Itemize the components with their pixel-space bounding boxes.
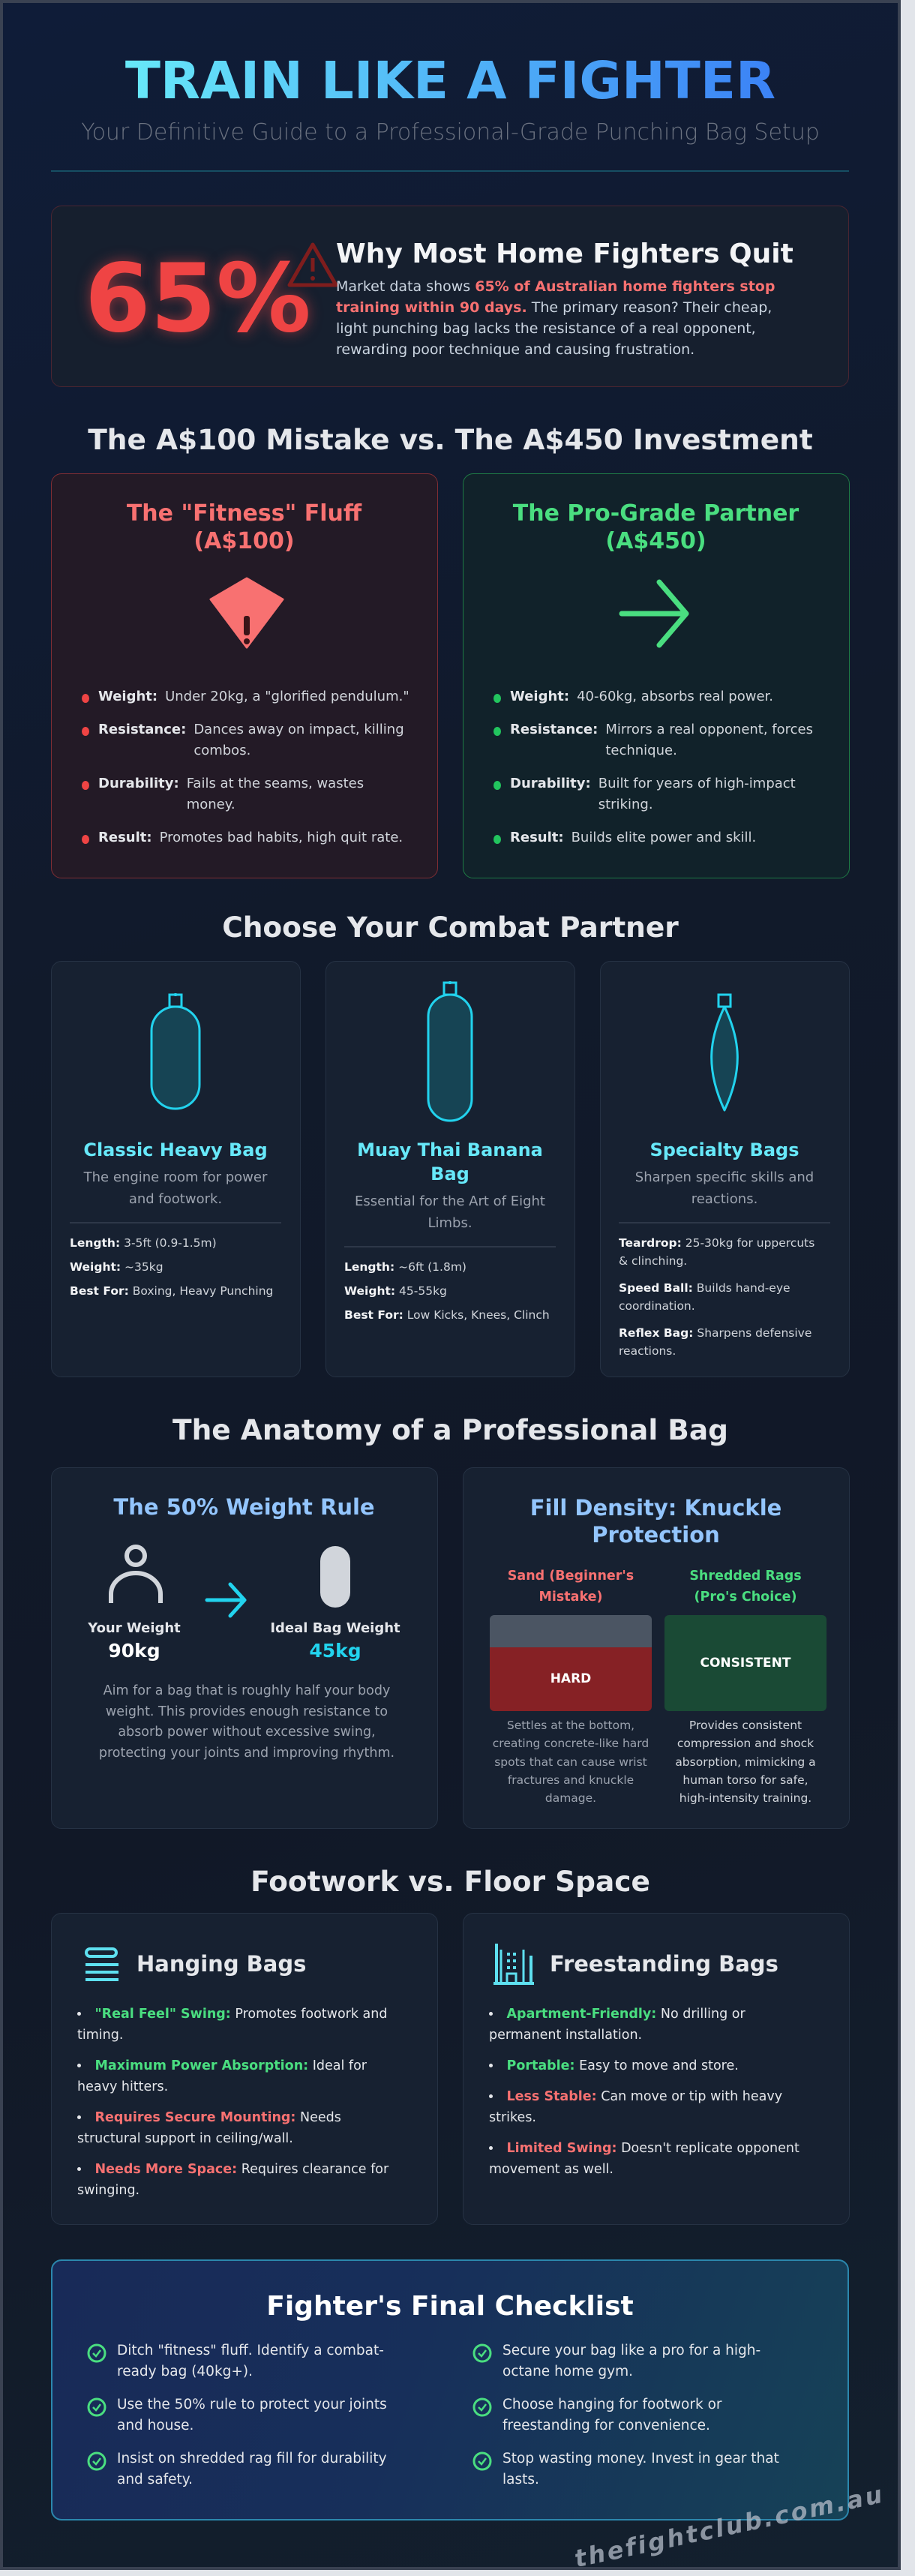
panel: hanging bags	[51, 1913, 438, 2225]
checklist title: Fighter's Final Checklist	[266, 2291, 634, 2322]
icon: arrow	[206, 1583, 247, 1617]
bag title: Length: ~6ft (1.8m)	[344, 1260, 466, 1274]
rags column: Provides consistent compression and shock absorption, mimicking a human torso for safe, high-intensity training.	[675, 1719, 816, 1805]
bullet list	[82, 689, 410, 845]
panel title: Fill Density: Knuckle	[530, 1495, 782, 1521]
left column items	[87, 2343, 387, 2487]
panel: muay thai bag	[326, 961, 575, 1377]
bullet list: Resistance:	[510, 722, 598, 737]
ideal bag weight	[270, 1620, 400, 1662]
subtitle: Your Definitive Guide to a Professional-Grade Punching Bag Setup	[81, 119, 820, 146]
panel: stat 65%	[51, 206, 849, 387]
ideal bag weight: Ideal Bag Weight	[270, 1620, 400, 1636]
heading: Why Most Home Fighters Quit	[336, 239, 794, 269]
text block: Market data shows 65% of Australian home fighters stop training within 90 days. The primary reason? Their cheap, light punching bag lacks the resistance of a real opponent, rewarding poor technique and causing frustration.	[336, 278, 775, 358]
sand column	[490, 1569, 652, 1805]
panel: fill density	[463, 1467, 850, 1829]
bullet list: Mirrors a real opponent, forces technique.	[605, 722, 813, 758]
sand box	[490, 1615, 652, 1711]
bag title: Weight: 45-55kg	[344, 1284, 447, 1298]
bullet list: Under 20kg, a "glorified pendulum."	[165, 689, 410, 704]
bag title: Classic Heavy Bag	[83, 1139, 268, 1160]
bullet list: Durability:	[98, 776, 179, 791]
bullet list: Promotes bad habits, high quit rate.	[160, 830, 403, 845]
card title: The "Fitness" Fluff	[127, 500, 362, 527]
bullet list	[77, 2007, 388, 2198]
panel: freestanding bags	[463, 1913, 850, 2225]
bag title: Best For: Boxing, Heavy Punching	[70, 1284, 273, 1298]
icon: person	[109, 1545, 163, 1603]
bag title: Reflex Bag: Sharpens defensive reactions.	[619, 1326, 812, 1358]
bag title: Specialty Bags	[650, 1139, 800, 1160]
bag title: Speed Ball: Builds hand-eye coordination.	[619, 1281, 790, 1313]
icon: building	[494, 1944, 534, 1985]
right column items: Choose hanging for footwork or freestanding for convenience.	[502, 2397, 722, 2433]
bag title	[619, 1139, 830, 1358]
heading: combat partner: Choose Your Combat Partner	[222, 911, 679, 944]
bullet list: Apartment-Friendly: No drilling or permanent installation.	[489, 2007, 746, 2043]
panel: final checklist	[51, 2259, 849, 2520]
big stat: 65%	[85, 243, 311, 353]
icon: hanging	[85, 1947, 118, 1981]
icon: warning kite	[209, 578, 284, 649]
your weight: Your Weight	[88, 1620, 181, 1636]
bag title: The engine room for power and footwork.	[84, 1169, 267, 1207]
bullet list: Fails at the seams, wastes money.	[187, 776, 364, 812]
icon: banana bag	[428, 981, 472, 1122]
panel: pro-grade partner	[463, 473, 850, 878]
bullet list: Less Stable: Can move or tip with heavy strikes.	[489, 2089, 782, 2125]
panel: classic heavy bag	[51, 961, 301, 1377]
panel title: The 50% Weight Rule	[113, 1494, 375, 1520]
bag title: Teardrop: 25-30kg for uppercuts	[619, 1236, 814, 1250]
right column items: Secure your bag like a pro for a high-octane home gym.	[502, 2343, 760, 2379]
right column items	[472, 2343, 779, 2487]
heading: mistake vs investment: The A$100 Mistake vs. The A$450 Investment	[88, 423, 813, 456]
heading: anatomy: The Anatomy of a Professional Bag	[172, 1413, 728, 1446]
card title: (A$100)	[194, 528, 295, 554]
bag title: Essential for the Art of Eight Limbs.	[355, 1193, 545, 1231]
icon: bag	[320, 1546, 350, 1608]
card title	[127, 500, 362, 554]
card heading: Hanging Bags	[136, 1951, 306, 1977]
rags column: Shredded Rags (Pro's Choice)	[689, 1569, 802, 1605]
bullet list	[494, 689, 813, 845]
bullet list: Needs More Space: Requires clearance for swinging.	[77, 2162, 388, 2198]
your weight: 90kg	[108, 1640, 160, 1662]
left column items: Ditch "fitness" fluff. Identify a combat-ready bag (40kg+).	[117, 2343, 384, 2379]
panel: 50% weight rule	[51, 1467, 438, 1829]
panel: fitness fluff	[51, 473, 438, 878]
title: TRAIN LIKE A FIGHTER	[125, 51, 776, 111]
rags column	[664, 1569, 826, 1805]
bullet list	[489, 2007, 800, 2177]
icon: heavy bag	[150, 993, 201, 1110]
bullet list: Result:	[510, 830, 564, 845]
bag title: & clinching.	[619, 1254, 687, 1268]
bag title: Best For: Low Kicks, Knees, Clinch	[344, 1308, 550, 1322]
card heading: Freestanding Bags	[550, 1951, 778, 1977]
bullet list: Weight:	[98, 689, 158, 704]
ideal bag weight: 45kg	[309, 1640, 362, 1662]
bullet list: "Real Feel" Swing: Promotes footwork and timing.	[77, 2007, 387, 2043]
bullet list: Result:	[98, 830, 152, 845]
sand column: Settles at the bottom, creating concrete-like hard spots that can cause wrist fractures and knuckle damage.	[493, 1719, 649, 1805]
icon: warning	[288, 243, 338, 287]
bullet list: Maximum Power Absorption: Ideal for heavy hitters.	[77, 2058, 367, 2094]
icon: teardrop bag	[710, 993, 739, 1112]
bullet list: Portable: Easy to move and store.	[507, 2058, 739, 2073]
card title	[513, 500, 800, 554]
your weight	[88, 1620, 181, 1662]
bullet list: Resistance:	[98, 722, 186, 737]
bullet list: Weight:	[510, 689, 569, 704]
bag title	[70, 1139, 281, 1298]
panel: specialty bags	[600, 961, 850, 1377]
card title: (A$450)	[605, 528, 706, 554]
panel title	[530, 1495, 782, 1548]
bullet list: Requires Secure Mounting: Needs structural support in ceiling/wall.	[77, 2110, 341, 2146]
bag title: Sharpen specific skills and reactions.	[635, 1169, 814, 1207]
card title: The Pro-Grade Partner	[513, 500, 799, 527]
bag title: Length: 3-5ft (0.9-1.5m)	[70, 1236, 217, 1250]
bullet list: Dances away on impact, killing combos.	[194, 722, 404, 758]
sand column: Sand (Beginner's Mistake)	[508, 1569, 634, 1605]
bullet list: Durability:	[510, 776, 591, 791]
heading: footwork: Footwork vs. Floor Space	[250, 1865, 650, 1898]
left column items: Use the 50% rule to protect your joints and house.	[117, 2397, 387, 2433]
bullet list: Builds elite power and skill.	[572, 830, 756, 845]
icon: arrow	[620, 579, 688, 648]
text block: Aim for a bag that is roughly half your body weight. This provides enough resistance to absorb power without excessive swing, protecting your joints and improving rhythm.	[99, 1683, 394, 1761]
bag title: Muay Thai Banana Bag	[357, 1139, 543, 1184]
rags box	[664, 1615, 826, 1711]
right column items: Stop wasting money. Invest in gear that lasts.	[502, 2451, 779, 2487]
rags box: CONSISTENT	[700, 1656, 790, 1671]
left column items: Insist on shredded rag fill for durability and safety.	[117, 2451, 387, 2487]
bullet list: 40-60kg, absorbs real power.	[577, 689, 773, 704]
bullet list: Limited Swing: Doesn't replicate opponent movement as well.	[489, 2141, 800, 2177]
bag title: Weight: ~35kg	[70, 1260, 164, 1274]
panel title: Protection	[592, 1522, 720, 1548]
sand box: HARD	[550, 1671, 591, 1686]
bullet list: Built for years of high-impact striking.	[598, 776, 796, 812]
bag title	[344, 1139, 556, 1322]
